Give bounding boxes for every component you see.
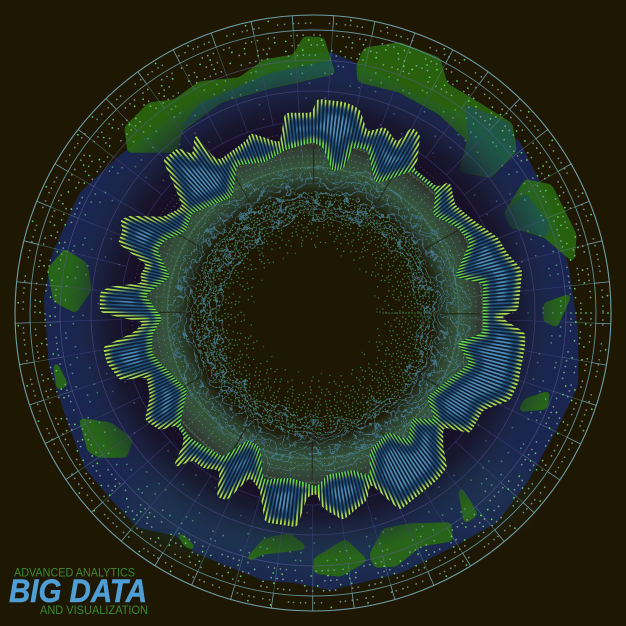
subtitle: and visualization: AND VISUALIZATION	[40, 603, 148, 617]
teal overlap of green and blue layers	[182, 62, 548, 235]
blue outer data layer	[47, 55, 575, 587]
dark radial markers	[165, 165, 461, 461]
inner grid dots	[132, 132, 494, 494]
dark inner wash	[51, 51, 575, 575]
radial hatch bars	[100, 99, 526, 527]
title: big data: BIG DATA	[9, 573, 147, 609]
band shadow	[100, 100, 525, 526]
waveform band	[100, 99, 526, 527]
inner grid	[143, 143, 483, 483]
scatter dots	[194, 193, 434, 433]
jagged wire rings	[174, 174, 466, 466]
inner disc	[145, 142, 483, 487]
subtitle: advanced analytics: ADVANCED ANALYTICS	[14, 566, 135, 580]
green outer data blobs	[50, 39, 574, 574]
title block	[9, 566, 148, 617]
